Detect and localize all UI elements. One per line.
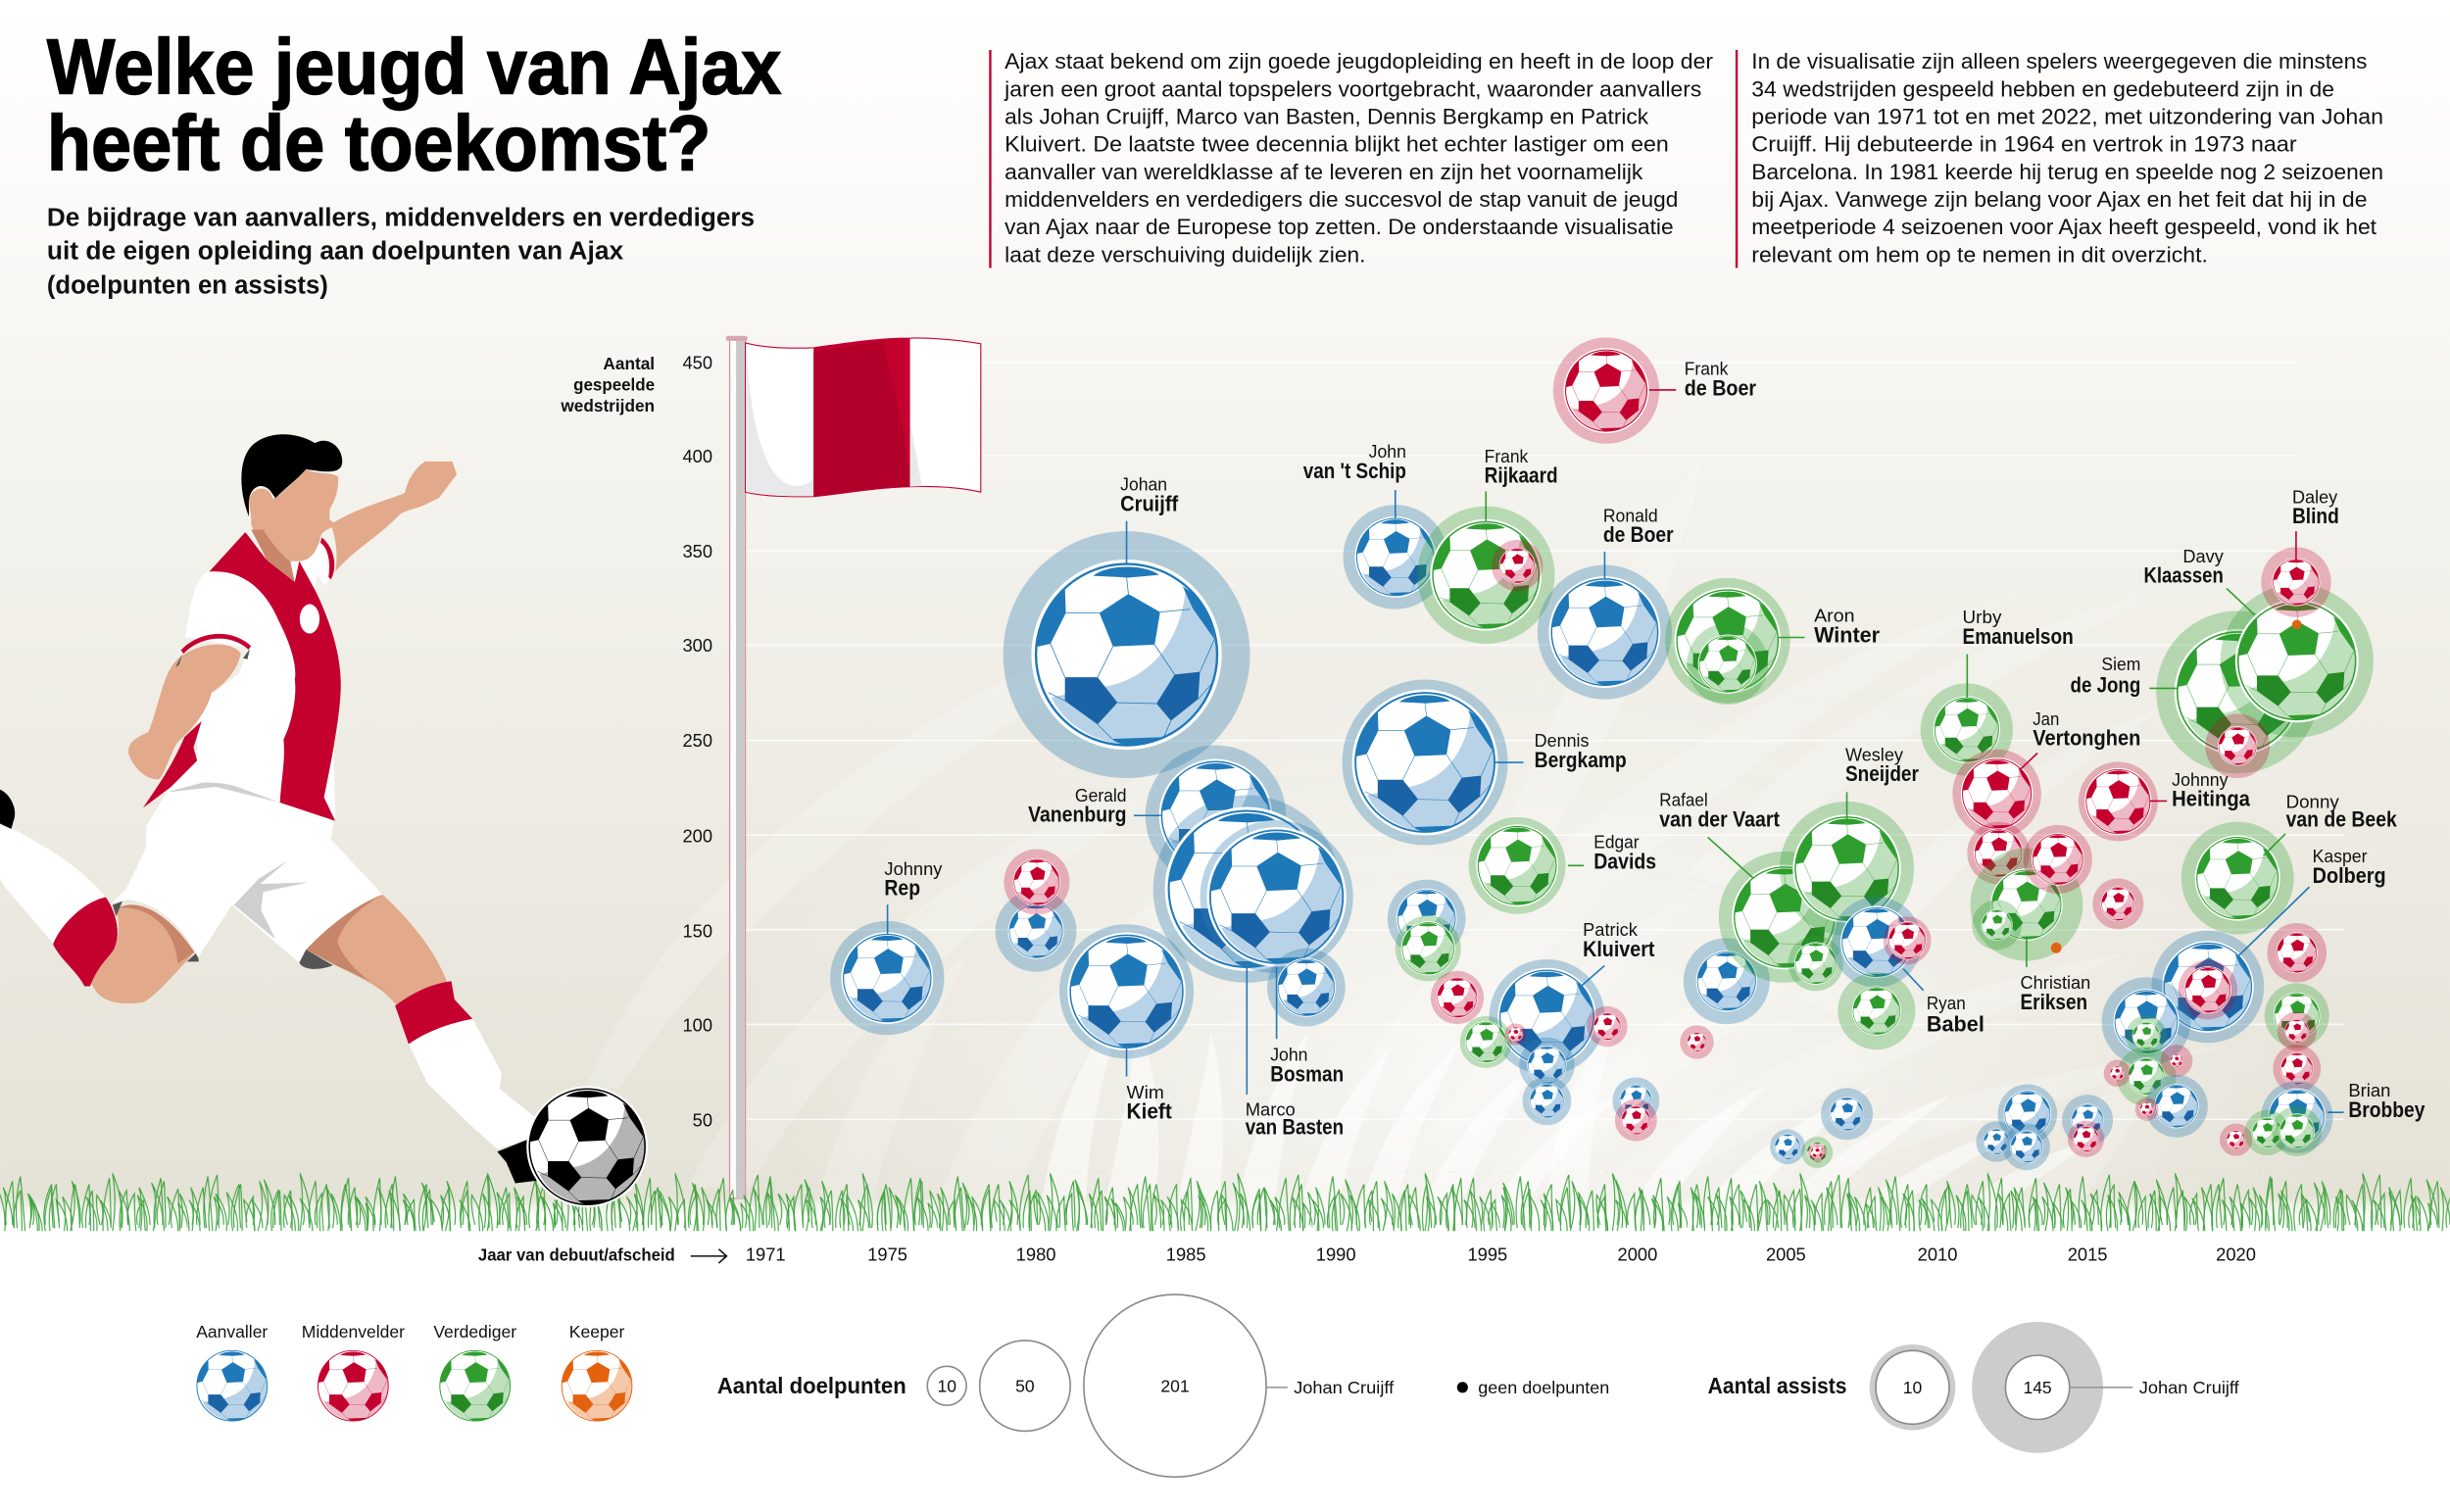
label: Patrick Kluivert xyxy=(1583,919,1655,961)
head xyxy=(241,434,342,582)
label: Johnny Rep xyxy=(884,858,943,901)
y axis numbers: 300 xyxy=(682,635,712,656)
label: Frank de Boer: Frank xyxy=(1685,359,1729,379)
x axis years xyxy=(746,1244,2256,1265)
label: Frank de Boer: de Boer xyxy=(1685,375,1756,400)
y axis title: Aantal xyxy=(603,354,655,373)
label: Davy Klaassen: Davy xyxy=(2182,546,2225,566)
label: Rafael van der Vaart xyxy=(1659,790,1780,831)
y axis numbers: 100 xyxy=(682,1014,712,1035)
x axis years: 1980 xyxy=(1016,1244,1055,1265)
label: Siem de Jong: de Jong xyxy=(2071,672,2140,697)
y axis numbers: 250 xyxy=(682,730,712,751)
label: Christian Eriksen: Christian xyxy=(2021,972,2090,993)
ball: aanvaller xyxy=(2062,1095,2113,1146)
label: Wesley Sneijder xyxy=(1845,744,1919,786)
ball: aanvaller xyxy=(2145,1075,2208,1138)
y axis numbers: 50 xyxy=(693,1110,712,1131)
legend: aantal doelpunten: Aantal doelpunten xyxy=(717,1373,906,1398)
label: Johnny Rep: Rep xyxy=(884,876,920,901)
legend item: Aanvaller xyxy=(195,1322,269,1423)
label: Wesley Sneijder: Wesley xyxy=(1845,744,1904,764)
x axis years: 2015 xyxy=(2068,1244,2107,1265)
label: Edgar Davids: Edgar xyxy=(1593,832,1640,853)
x axis years: 2020 xyxy=(2216,1244,2256,1265)
label: Kasper Dolberg xyxy=(2313,846,2386,888)
ball: Edgar Davids xyxy=(1469,817,1566,914)
label: Gerald Vanenburg: Gerald xyxy=(1075,785,1127,805)
ball: Daley Blind xyxy=(2261,547,2331,617)
intro paragraph left: als Johan Cruijff, Marco van Basten, Dennis Bergkamp en Patrick xyxy=(1004,105,1649,129)
label: Kasper Dolberg: Kasper xyxy=(2313,846,2367,866)
ball: Donny van de Beek xyxy=(2181,822,2294,934)
ball: middenvelder xyxy=(1680,1025,1714,1059)
label: Aron Winter: Aron xyxy=(1814,606,1855,626)
intro paragraph left: aanvaller van wereldklasse af te leveren en zijn het voornamelijk xyxy=(1004,160,1643,184)
label: Ryan Babel: Ryan xyxy=(1927,993,1966,1013)
y axis numbers xyxy=(682,352,712,1131)
label: Marco van Basten: van Basten xyxy=(1246,1115,1344,1140)
ball: verdediger xyxy=(2272,1106,2322,1156)
label: Urby Emanuelson: Emanuelson xyxy=(1963,624,2074,649)
label: Jan Vertonghen xyxy=(2033,708,2140,751)
ball: Aron Winter xyxy=(1665,578,1790,703)
ball: middenvelder xyxy=(2278,1011,2317,1050)
ball: middenvelder xyxy=(1004,850,1069,915)
legend: aantal assists: Johan Cruijff xyxy=(2139,1378,2239,1397)
ball: aanvaller xyxy=(1519,1038,1575,1093)
ball: middenvelder xyxy=(1615,1099,1657,1142)
label: Christian Eriksen xyxy=(2021,972,2090,1014)
label: Donny van de Beek: Donny xyxy=(2286,791,2340,811)
intro paragraph left: jaren een groot aantal topspelers voortgebracht, waaronder aanvallers xyxy=(1004,76,1701,101)
ball: aanvaller xyxy=(1684,938,1770,1024)
label: Johnny Heitinga: Johnny xyxy=(2172,769,2229,790)
label: Marco van Basten xyxy=(1246,1098,1344,1140)
subtitle: uit de eigen opleiding aan doelpunten van Ajax xyxy=(47,236,624,266)
title xyxy=(47,24,781,186)
label: John van 't Schip: John xyxy=(1369,441,1406,462)
ball: middenvelder xyxy=(2205,713,2270,778)
legend item: Middenvelder: Middenvelder xyxy=(302,1322,405,1341)
legend: aantal doelpunten xyxy=(717,1294,1609,1477)
label: Dennis Bergkamp: Dennis xyxy=(1535,730,1589,751)
keeper dot: geen doelpunten xyxy=(2051,943,2062,953)
ball: Christian Eriksen xyxy=(1971,849,2082,961)
label: Johan Cruijff xyxy=(1120,474,1179,515)
legend item: Keeper: Keeper xyxy=(569,1322,624,1341)
label: Gerald Vanenburg xyxy=(1028,785,1127,827)
ball: middenvelder xyxy=(2273,1045,2321,1093)
label: Wesley Sneijder: Sneijder xyxy=(1845,761,1919,786)
ball: verdediger xyxy=(2126,1015,2167,1056)
title: heeft de toekomst? xyxy=(47,99,710,186)
label: Johnny Rep: Johnny xyxy=(884,858,943,879)
label: Dennis Bergkamp xyxy=(1535,730,1627,772)
ball: middenvelder xyxy=(1492,540,1543,591)
intro paragraph right: In de visualisatie zijn alleen spelers weergegeven die minstens xyxy=(1751,49,2367,73)
label: Frank Rijkaard xyxy=(1485,446,1558,488)
label: Kasper Dolberg: Dolberg xyxy=(2313,863,2386,888)
label: Daley Blind: Daley xyxy=(2292,486,2338,507)
ball: aanvaller xyxy=(1388,880,1466,957)
label: Daley Blind: Blind xyxy=(2292,504,2339,528)
ball: aanvaller xyxy=(1976,1121,2017,1162)
legend: aantal assists: Aantal assists xyxy=(1708,1373,1847,1398)
ball: aanvaller xyxy=(1821,1088,1873,1140)
legend: aantal doelpunten: 201 xyxy=(1160,1377,1190,1396)
ball: verdediger xyxy=(1460,1016,1512,1068)
ball: middenvelder xyxy=(1587,1006,1628,1047)
label: Christian Eriksen: Eriksen xyxy=(2021,990,2087,1014)
ball: Frank de Boer xyxy=(1553,337,1659,444)
intro paragraph right xyxy=(1736,49,2383,268)
x axis years: 2005 xyxy=(1766,1244,1806,1265)
label: Siem de Jong xyxy=(2071,654,2140,697)
flag pole xyxy=(726,336,748,1198)
intro paragraph left xyxy=(989,49,1714,268)
label: Wim Kieft: Wim xyxy=(1127,1082,1164,1102)
label: Donny van de Beek xyxy=(2286,791,2397,831)
ball: middenvelder xyxy=(1808,1143,1827,1162)
intro paragraph right: periode van 1971 tot en met 2022, met uitzondering van Johan xyxy=(1751,105,2383,129)
ball: Rafael van der Vaart xyxy=(1719,852,1850,983)
label: Aron Winter: Winter xyxy=(1814,622,1880,647)
ball: middenvelder xyxy=(2220,1124,2252,1156)
legend item: Verdediger xyxy=(433,1322,516,1423)
legend: aantal assists: 10 xyxy=(1903,1378,1923,1397)
legend item: Middenvelder xyxy=(302,1322,405,1423)
ball: Urby Emanuelson xyxy=(1921,683,2013,776)
legend: aantal doelpunten: 50 xyxy=(1015,1377,1035,1396)
x axis years: 1995 xyxy=(1467,1244,1507,1265)
ball: verdediger xyxy=(1801,1137,1833,1168)
ball: Johan Cruijff xyxy=(1004,531,1250,778)
label: John Bosman xyxy=(1270,1045,1344,1086)
y axis numbers: 150 xyxy=(682,921,712,942)
ball: Siem de Jong xyxy=(2156,610,2319,773)
label: Rafael van der Vaart: van der Vaart xyxy=(1659,806,1780,831)
corner flag xyxy=(746,338,981,497)
ball: Johnny Rep xyxy=(830,921,944,1035)
intro paragraph right: Barcelona. In 1981 keerde hij terug en speelde nog 2 seizoenen xyxy=(1751,160,2383,184)
ball: middenvelder xyxy=(2092,878,2143,929)
ball: middenvelder xyxy=(2267,923,2327,983)
ball: verdediger xyxy=(1687,623,1768,705)
x axis title: Jaar van debuut/afscheid xyxy=(478,1245,675,1265)
label: Frank Rijkaard: Rijkaard xyxy=(1485,463,1558,488)
x axis years: 1990 xyxy=(1316,1244,1356,1265)
label: Johan Cruijff: Cruijff xyxy=(1120,491,1179,515)
intro paragraph left: van Ajax naar de Europese top zetten. De onderstaande visualisatie xyxy=(1004,215,1674,239)
arms xyxy=(128,462,457,779)
label: Rafael van der Vaart: Rafael xyxy=(1659,790,1708,810)
ball: Marco van Basten xyxy=(1153,796,1341,983)
ball: middenvelder xyxy=(2161,1045,2192,1077)
label: Wim Kieft: Kieft xyxy=(1127,1099,1172,1124)
ball: middenvelder xyxy=(2104,1060,2131,1087)
y axis numbers: 200 xyxy=(682,825,712,846)
label: Johnny Heitinga xyxy=(2172,769,2250,811)
ball: middenvelder xyxy=(2024,825,2092,894)
ball: Brian Brobbey xyxy=(2261,1081,2332,1153)
label: Edgar Davids: Davids xyxy=(1593,849,1656,873)
label: John Bosman: Bosman xyxy=(1270,1061,1344,1086)
label: Aron Winter xyxy=(1814,606,1880,647)
intro paragraph left: laat deze verschuiving duidelijk zien. xyxy=(1004,242,1365,267)
ball: Ronald de Boer xyxy=(1538,565,1672,700)
ball: Johnny Heitinga xyxy=(2079,761,2158,841)
label: Brian Brobbey xyxy=(2348,1080,2426,1122)
label: Brian Brobbey: Brian xyxy=(2348,1080,2390,1100)
legend: position xyxy=(195,1322,634,1423)
ball: Kasper Dolberg xyxy=(2151,931,2264,1043)
legend: aantal assists xyxy=(1708,1322,2239,1453)
back leg xyxy=(0,790,199,1003)
label: Wim Kieft xyxy=(1127,1082,1172,1124)
ball: middenvelder xyxy=(1967,822,2030,884)
x axis years: 1975 xyxy=(867,1244,907,1265)
label: Ronald de Boer xyxy=(1603,506,1674,547)
ball: Wesley Sneijder xyxy=(1780,802,1914,936)
intro paragraph left: middenvelders en verdedigers die succesvol de stap vanuit de jeugd xyxy=(1004,187,1678,212)
label: Donny van de Beek: van de Beek xyxy=(2286,806,2397,831)
legend: aantal doelpunten: geen doelpunten xyxy=(1478,1378,1609,1397)
y axis numbers: 400 xyxy=(682,446,712,466)
label: Ronald de Boer: Ronald xyxy=(1603,506,1658,526)
player labels xyxy=(884,359,2426,1140)
shirt xyxy=(143,532,341,821)
label: Brian Brobbey: Brobbey xyxy=(2348,1097,2426,1122)
ball: Patrick Kluivert xyxy=(1489,959,1604,1075)
ball: John van 't Schip xyxy=(1344,505,1447,610)
label: Daley Blind xyxy=(2292,486,2339,528)
leader lines xyxy=(888,390,2344,1112)
legend item: Verdediger: Verdediger xyxy=(433,1322,516,1341)
label: Urby Emanuelson xyxy=(1963,607,2074,649)
label: Urby Emanuelson: Urby xyxy=(1963,607,2002,627)
legend: aantal doelpunten: 10 xyxy=(937,1377,956,1396)
intro paragraph left: Ajax staat bekend om zijn goede jeugdopleiding en heeft in de loop der xyxy=(1004,49,1714,73)
subtitle xyxy=(47,202,755,299)
intro paragraph right: bij Ajax. Vanwege zijn belang voor Ajax en het feit dat hij in de xyxy=(1751,187,2367,212)
ball: Gerald Vanenburg xyxy=(1146,746,1286,886)
grid lines xyxy=(746,363,2344,1119)
label: Ryan Babel xyxy=(1927,993,1984,1036)
ball: Frank Rijkaard xyxy=(1417,507,1554,644)
label: Patrick Kluivert: Patrick xyxy=(1583,919,1639,940)
ball: John Bosman xyxy=(1200,820,1353,973)
background swooshes xyxy=(584,453,2234,1219)
ball: aanvaller xyxy=(2003,1123,2050,1170)
legend: aantal doelpunten: Johan Cruijff xyxy=(1294,1378,1394,1397)
label: Dennis Bergkamp: Bergkamp xyxy=(1535,748,1627,772)
label: John Bosman: John xyxy=(1270,1045,1308,1065)
intro paragraph left: Kluivert. De laatste twee decennia blijkt het echter lastiger om een xyxy=(1004,132,1669,157)
label: Jan Vertonghen: Jan xyxy=(2033,708,2059,729)
label: Gerald Vanenburg: Vanenburg xyxy=(1028,803,1127,827)
ball: aanvaller xyxy=(1523,1077,1571,1125)
ball: aanvaller xyxy=(1612,1077,1659,1124)
label: Johnny Heitinga: Heitinga xyxy=(2172,787,2250,811)
label: Frank de Boer xyxy=(1685,359,1756,400)
front leg xyxy=(299,895,538,1183)
x axis years: 1985 xyxy=(1166,1244,1206,1265)
intro paragraph right: Cruijff. Hij debuteerde in 1964 en vertrok in 1973 naar xyxy=(1751,132,2297,157)
label: Patrick Kluivert: Kluivert xyxy=(1583,937,1655,961)
ball: verdediger xyxy=(2117,1047,2176,1106)
y axis title: wedstrijden xyxy=(560,396,655,415)
label: Johan Cruijff: Johan xyxy=(1120,474,1167,495)
ball: verdediger xyxy=(1396,915,1461,981)
label: John van 't Schip xyxy=(1303,441,1406,483)
ball: aanvaller xyxy=(2102,977,2190,1066)
legend item: Aanvaller: Aanvaller xyxy=(196,1322,268,1341)
ball: Dennis Bergkamp xyxy=(1343,680,1508,846)
ball: middenvelder xyxy=(2068,1121,2104,1157)
y axis numbers: 450 xyxy=(682,352,712,372)
ball: verdediger xyxy=(1838,972,1915,1049)
ball: middenvelder xyxy=(1504,1023,1527,1046)
keeper dot: geen doelpunten xyxy=(2292,619,2302,629)
intro paragraph right: relevant om hem op te nemen in dit overzicht. xyxy=(1751,242,2208,267)
ball: Ryan Babel xyxy=(1832,897,1922,988)
x axis years: 1971 xyxy=(746,1244,786,1265)
ball: middenvelder xyxy=(2179,960,2237,1019)
ball: Davy Klaassen xyxy=(2221,584,2374,738)
y axis numbers: 350 xyxy=(682,541,712,561)
ball: verdediger xyxy=(1972,900,2022,950)
ball: Wim Kieft xyxy=(1059,924,1194,1058)
ball: verdediger xyxy=(2244,1110,2290,1155)
ball: middenvelder xyxy=(1884,916,1931,964)
bubble chart: players xyxy=(830,337,2374,1170)
grass xyxy=(0,1172,2450,1235)
y axis title: gespeelde xyxy=(573,375,655,395)
y axis title xyxy=(560,354,655,415)
ball: Jan Vertonghen xyxy=(1952,750,2041,838)
arrow xyxy=(691,1249,726,1263)
ball: aanvaller xyxy=(996,891,1077,972)
ball: middenvelder xyxy=(2135,1097,2159,1121)
subtitle: (doelpunten en assists) xyxy=(47,269,328,299)
ball: aanvaller xyxy=(1267,949,1346,1027)
label: Ronald de Boer: de Boer xyxy=(1603,522,1674,547)
subtitle: De bijdrage van aanvallers, middenvelders en verdedigers xyxy=(47,202,755,231)
ball: verdediger xyxy=(1788,936,1843,991)
label: Siem de Jong: Siem xyxy=(2101,654,2140,674)
ball at player's foot xyxy=(526,1086,648,1207)
label: Jan Vertonghen: Vertonghen xyxy=(2033,726,2140,751)
player kicking the ball xyxy=(0,434,538,1183)
label: Davy Klaassen xyxy=(2143,546,2225,588)
label: Ryan Babel: Babel xyxy=(1927,1011,1984,1036)
intro paragraph right: 34 wedstrijden gespeeld hebben en gedebuteerd zijn in de xyxy=(1751,76,2334,101)
label: Frank Rijkaard: Frank xyxy=(1485,446,1529,466)
ball: aanvaller xyxy=(1770,1129,1805,1164)
ball: aanvaller xyxy=(1998,1084,2057,1144)
label: Edgar Davids xyxy=(1593,832,1656,873)
title: Welke jeugd van Ajax xyxy=(47,24,781,111)
legend: aantal assists: 145 xyxy=(2023,1378,2052,1397)
shorts xyxy=(113,779,382,962)
x axis years: 2010 xyxy=(1918,1244,1957,1265)
ball: verdediger xyxy=(2265,983,2329,1048)
ball: middenvelder xyxy=(1431,971,1484,1024)
x axis years: 2000 xyxy=(1618,1244,1657,1265)
label: Marco van Basten: Marco xyxy=(1246,1098,1296,1119)
legend item: Keeper xyxy=(560,1322,634,1423)
intro paragraph right: meetperiode 4 seizoenen voor Ajax heeft gespeeld, vond ik het xyxy=(1751,215,2377,239)
label: John van 't Schip: van 't Schip xyxy=(1303,459,1406,483)
label: Davy Klaassen: Klaassen xyxy=(2143,563,2224,588)
